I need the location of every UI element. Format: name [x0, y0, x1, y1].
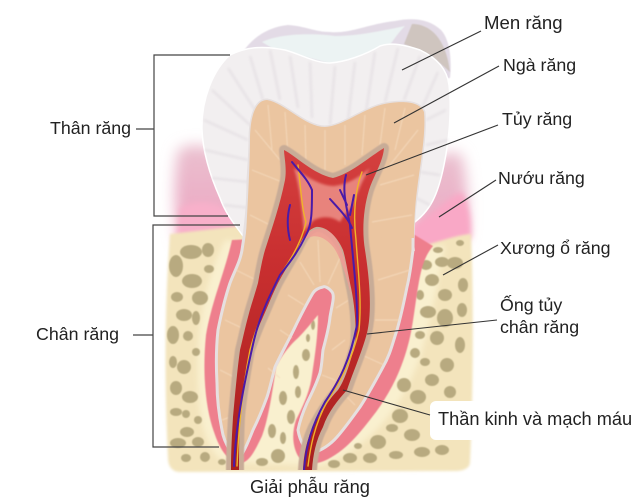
bracket: root	[133, 225, 240, 447]
label: Thân răng: Thân răng	[50, 118, 131, 138]
enamel crown	[202, 44, 450, 250]
label: Nướu răng: Nướu răng	[498, 168, 585, 188]
pulp chamber and canals	[231, 148, 384, 470]
label: Ống tủy chân răng: Ống tủy	[500, 295, 562, 315]
leader lines	[343, 31, 499, 415]
label: Men răng: Men răng	[484, 12, 563, 33]
label: Xương ổ răng: Xương ổ răng	[500, 238, 611, 258]
label background: nerves and vessels	[430, 401, 640, 440]
bracket: crown	[136, 55, 230, 216]
periodontal ligament	[204, 232, 433, 463]
label: Ống tủy chân răng: chân răng	[500, 317, 579, 337]
label: Ngà răng: Ngà răng	[503, 55, 576, 75]
back enamel surface	[243, 19, 451, 90]
label: Thần kinh và mạch máu: Thần kinh và mạch máu	[438, 409, 632, 429]
bone pores	[167, 240, 468, 468]
label: Tủy răng: Tủy răng	[502, 109, 572, 129]
label: Chân răng: Chân răng	[36, 324, 119, 344]
panel: tooth anatomy illustration	[166, 19, 473, 472]
alveolar bone	[166, 226, 473, 472]
nerves and blood vessels	[234, 162, 362, 470]
dentin	[216, 100, 424, 457]
caption: Giải phẫu răng	[250, 476, 370, 497]
gum tissue	[175, 145, 471, 285]
